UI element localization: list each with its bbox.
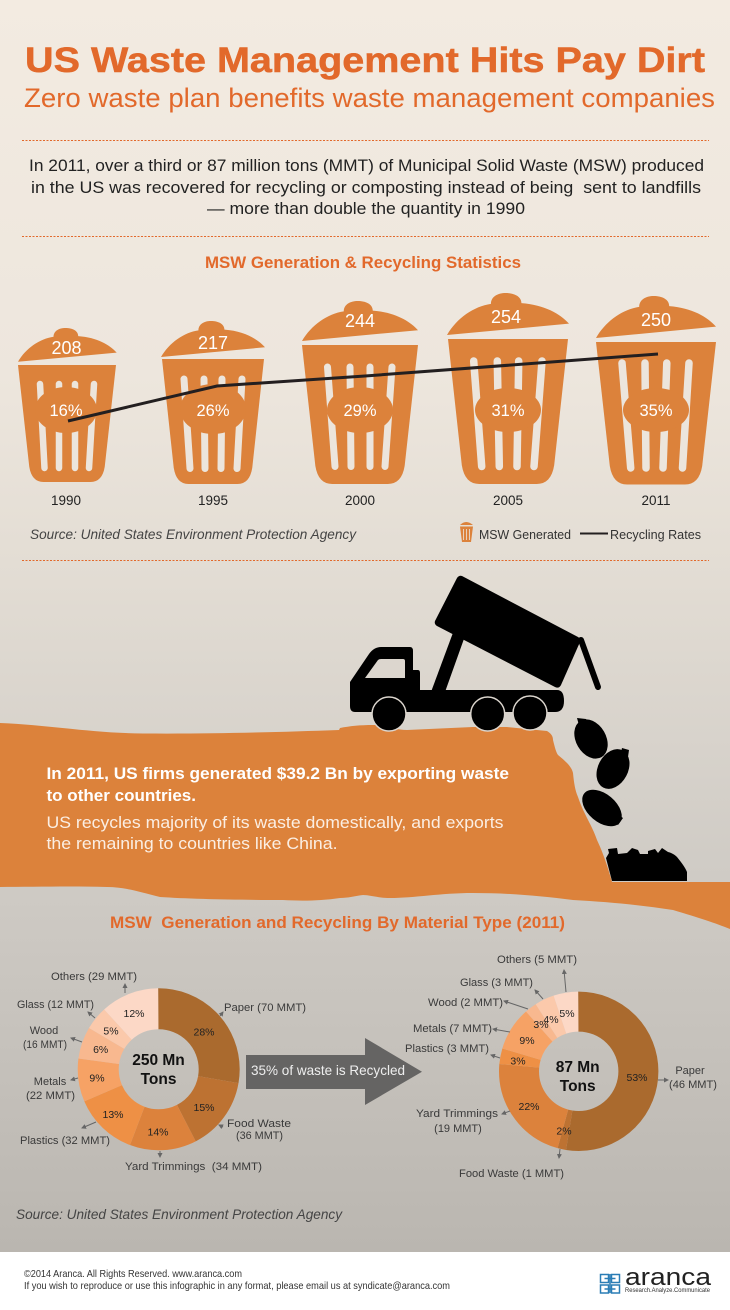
labels: generation: Yard Trimmings (34 MMT) (125, 1161, 262, 1173)
labels: generation: Plastics (32 MMT) (20, 1135, 110, 1147)
can 1995 (161, 321, 265, 508)
icon: trash can (460, 522, 473, 542)
labels: recycling: (19 MMT) (434, 1123, 482, 1135)
donut chart: recycling: 5% (559, 1008, 575, 1020)
arrows: recycling (491, 970, 668, 1158)
can 2000: 29% (343, 402, 377, 420)
labels: recycling: Metals (7 MMT) (413, 1023, 492, 1035)
can 2011: 250 (641, 310, 671, 330)
tailgate (581, 640, 598, 687)
intro paragraph: — more than double the quantity in 1990 (207, 199, 525, 218)
subtitle: Zero waste plan benefits waste management companies (24, 83, 715, 113)
labels: recycling: Others (5 MMT) (497, 954, 577, 966)
text block: exports: In 2011, US firms generated $39.2 Bn by exporting waste (46, 765, 509, 783)
donut chart: generation: Tons (141, 1071, 176, 1088)
donut chart: generation: 250 Mn (132, 1052, 185, 1069)
can 1990: 208 (51, 338, 82, 358)
logo: aranca: aranca (625, 1264, 712, 1291)
heading: statistics: MSW Generation & Recycling Statistics (205, 254, 521, 272)
donut chart: generation: 9% (89, 1072, 105, 1084)
can 2000 (302, 301, 418, 508)
arrow: 35% recycled (246, 1038, 422, 1105)
donut chart: recycling: 2% (556, 1126, 572, 1138)
labels: generation: (22 MMT) (26, 1090, 75, 1102)
donut chart: recycling: 87 Mn (556, 1059, 600, 1076)
footer (0, 1252, 730, 1310)
can 2011 (596, 296, 716, 508)
labels: generation: Wood (30, 1025, 58, 1037)
line: recycling rates (68, 354, 658, 421)
labels: generation (17, 971, 306, 1173)
labels: recycling: Wood (2 MMT) (428, 997, 503, 1009)
labels: generation: Others (29 MMT) (51, 971, 137, 983)
text block: exports (46, 765, 509, 853)
copyright text: ©2014 Aranca. All Rights Reserved. www.aranca.com (24, 1268, 242, 1280)
labels: recycling: Plastics (3 MMT) (405, 1043, 489, 1055)
donut chart: recycling: 4% (543, 1014, 559, 1026)
legend (460, 522, 701, 542)
can 1995: 1995 (198, 493, 228, 508)
can 2000: 2000 (345, 493, 375, 508)
intro paragraph: In 2011, over a third or 87 million tons (MMT) of Municipal Solid Waste (MSW) produced (29, 156, 704, 175)
donut chart: generation: 13% (102, 1109, 124, 1121)
donut chart: generation: 15% (193, 1102, 215, 1114)
can 1990: 1990 (51, 493, 81, 508)
donut chart: generation: 14% (147, 1126, 169, 1138)
donut chart: recycling: 3% (510, 1056, 526, 1068)
labels: recycling: Food Waste (1 MMT) (459, 1168, 564, 1180)
labels: generation: Glass (12 MMT) (17, 999, 94, 1011)
can 1990: 16% (49, 402, 83, 420)
cab and chassis (350, 647, 564, 712)
donut chart: generation (17, 971, 306, 1173)
legend: Recycling Rates (610, 527, 701, 542)
chart: trash cans (18, 293, 716, 508)
labels: generation: (16 MMT) (23, 1039, 67, 1051)
hydraulic arm (431, 630, 465, 692)
labels: generation: Food Waste (227, 1118, 291, 1130)
logo: aranca (600, 1264, 712, 1294)
donut chart: recycling: Tons (560, 1078, 596, 1095)
labels: generation: (36 MMT) (236, 1130, 283, 1142)
can 2005: 254 (491, 307, 521, 327)
labels: recycling: Yard Trimmings (416, 1108, 499, 1120)
can 2011: 2011 (641, 493, 671, 508)
heading: material type: MSW Generation and Recycling By Material Type (2011) (110, 914, 565, 932)
title: US Waste Management Hits Pay Dirt (25, 41, 705, 80)
logo: aranca: Research.Analyze.Communicate (625, 1288, 711, 1294)
copyright text (24, 1268, 450, 1292)
text block: exports: to other countries. (46, 787, 196, 805)
donut chart: recycling: 53% (626, 1072, 648, 1084)
wheels (372, 696, 547, 731)
can 2005: 2005 (493, 493, 523, 508)
arrows: generation (71, 984, 223, 1157)
can 1995: 217 (198, 333, 228, 353)
labels: generation: Paper (70 MMT) (224, 1002, 306, 1014)
can 2005: 31% (491, 402, 525, 420)
intro paragraph: in the US was recovered for recycling or composting instead of being sent to landfills (31, 178, 701, 197)
donut chart: generation: 5% (103, 1026, 119, 1038)
text block: exports: the remaining to countries like China. (46, 835, 338, 853)
icon: dump truck (350, 576, 598, 731)
donut chart: generation: 12% (123, 1008, 145, 1020)
icon: bag pile (606, 848, 687, 881)
text block: exports: US recycles majority of its waste domestically, and exports (46, 814, 504, 832)
donut chart: recycling: 9% (519, 1035, 535, 1047)
can 1995: 26% (196, 402, 230, 420)
source: materials: Source: United States Environment Protection Agency (16, 1206, 343, 1222)
labels: recycling (405, 954, 717, 1180)
can 2005 (447, 293, 569, 508)
can 2000: 244 (345, 311, 375, 331)
labels: recycling: Glass (3 MMT) (460, 977, 533, 989)
labels: recycling: (46 MMT) (669, 1079, 717, 1091)
intro paragraph (29, 156, 704, 218)
labels: recycling: Paper (675, 1065, 705, 1077)
donut chart: recycling: 22% (518, 1101, 540, 1113)
source: statistics: Source: United States Environment Protection Agency (30, 526, 357, 542)
donut chart: generation: 28% (193, 1026, 215, 1038)
can 1990 (18, 328, 117, 508)
land mass (0, 723, 730, 929)
legend: MSW Generated (479, 527, 571, 542)
truck bed (435, 576, 580, 688)
donut chart: recycling (405, 954, 717, 1180)
donut chart: generation: 6% (93, 1044, 108, 1056)
icon: falling bags (568, 713, 687, 881)
labels: generation: Metals (34, 1076, 67, 1088)
can 2011: 35% (639, 402, 673, 420)
donut chart: recycling: 3% (533, 1019, 549, 1031)
cab window (365, 659, 405, 678)
arrow: 35% recycled: 35% of waste is Recycled (251, 1062, 405, 1078)
copyright text: If you wish to reproduce or use this infographic in any format, please email us at syndicate@aranca.com (24, 1280, 450, 1292)
